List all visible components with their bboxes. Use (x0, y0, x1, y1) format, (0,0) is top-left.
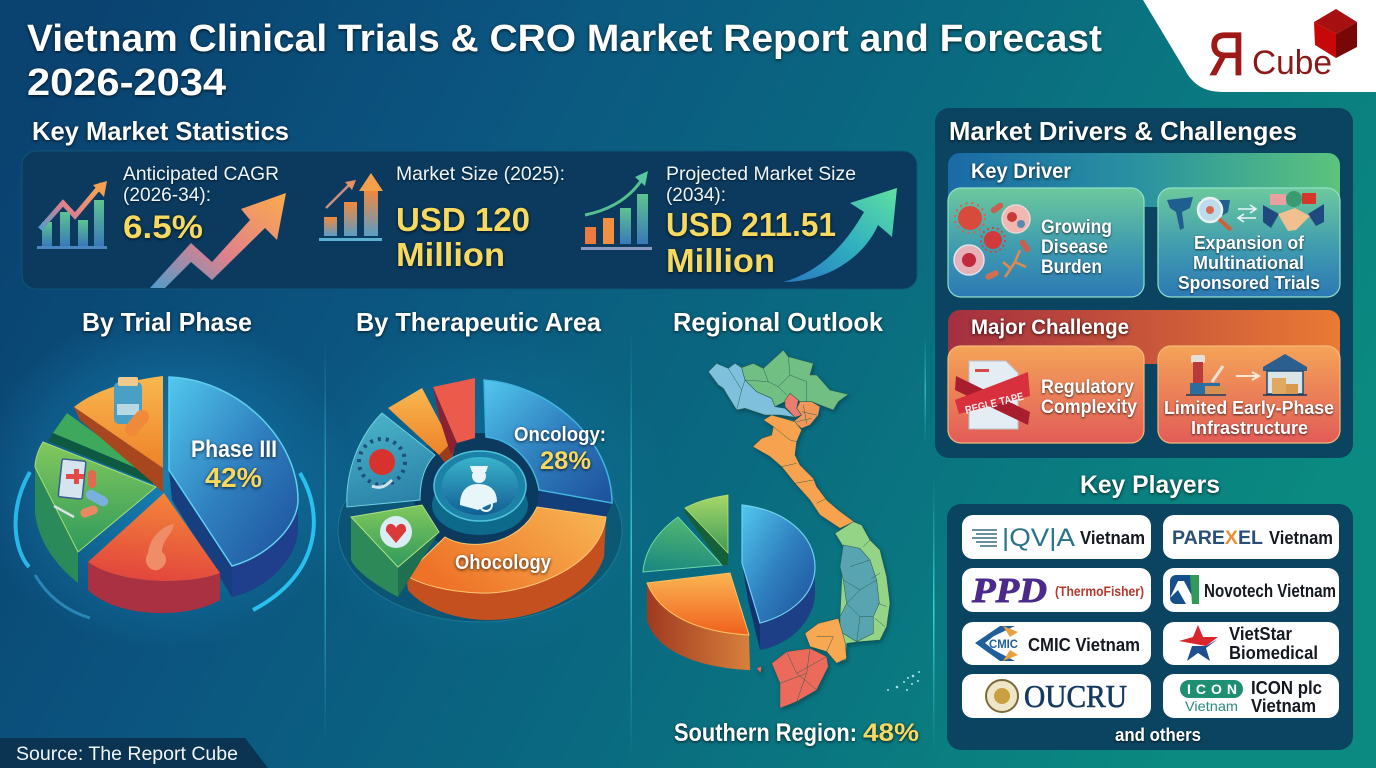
stat: projected market size (666, 163, 856, 279)
arrow: CAGR growth (150, 193, 286, 288)
label: Oncology 28%: 28% (540, 447, 591, 475)
icon: projected chart (581, 171, 652, 250)
panel: key market statistics (22, 151, 917, 289)
card: growing disease burden (948, 188, 1144, 297)
subheading panel: major challenge: Major Challenge (971, 316, 1129, 339)
icon: market size chart (319, 173, 383, 241)
map: Vietnam regions (708, 350, 890, 708)
label: Southern Region 48%: Southern Region: (674, 719, 857, 747)
logo: IQVIA: Vietnam (1080, 528, 1145, 548)
logo: VietStar: VietStar (1229, 624, 1292, 644)
slice: green (351, 505, 439, 597)
islands (887, 671, 920, 691)
logo: PPD Thermo Fisher: PPD (971, 571, 1047, 610)
card: expansion of sponsored trials (1158, 188, 1340, 297)
source tab: Source: The Report Cube (16, 744, 238, 765)
logo: ICON: ICON plc (1251, 678, 1322, 698)
note: and others: and others (1115, 725, 1201, 745)
logo: Parexel: PAREXEL (1172, 528, 1263, 549)
slice: oncology blue (484, 380, 612, 517)
stat: projected market size: (2034): (666, 184, 726, 206)
label: Phase III 42%: 42% (205, 462, 262, 493)
label (1041, 217, 1112, 278)
section headings: By Therapeutic Area (356, 307, 602, 337)
slice: red (88, 493, 220, 613)
label (1041, 377, 1137, 418)
logo: PPD Thermo Fisher (962, 568, 1151, 612)
panel: key players (947, 504, 1353, 750)
subheading panel: key driver: Key Driver (971, 160, 1071, 183)
slice: teal (347, 413, 435, 507)
stat: CAGR (123, 163, 279, 245)
label: Phase III 42%: Phase III (191, 436, 277, 463)
slice: green (35, 442, 156, 583)
label: Infrastructure (1191, 417, 1308, 438)
arrow: projected growth (783, 188, 897, 282)
slice: light green (684, 495, 728, 565)
stat: CAGR: (2026-34): (123, 184, 211, 206)
label: Growing (1041, 217, 1112, 238)
label: Southern Region 48%: 48% (863, 719, 919, 747)
slice: orange (647, 573, 750, 670)
logo: ICON: Vietnam (1185, 698, 1238, 714)
section headings (82, 307, 884, 337)
label: Expansion of (1194, 232, 1305, 253)
logo: OUCRU: OUCRU (1024, 678, 1127, 714)
label: Burden (1041, 257, 1102, 278)
logo tab: Cube (1252, 44, 1332, 82)
logo: CMIC: CMIC Vietnam (1028, 635, 1140, 655)
section headings: By Trial Phase (82, 307, 252, 337)
icon: world, magnifier, handshake (1167, 191, 1324, 231)
label: Disease (1041, 237, 1108, 258)
icon: factory to warehouse (1186, 354, 1307, 395)
pie chart: trial phase (16, 376, 314, 618)
logo: Novotech (1163, 568, 1339, 612)
logo: Parexel (1163, 515, 1339, 559)
icon: pathogens (954, 202, 1031, 281)
label: Ohocology: Ohocology (455, 552, 552, 574)
icon: red tape document (955, 361, 1030, 429)
section headings: Regional Outlook (673, 307, 884, 337)
title (27, 18, 1102, 104)
icon: CAGR chart (37, 181, 107, 249)
label (1178, 232, 1320, 293)
logo: OUCRU (962, 674, 1151, 718)
center button: doctor (432, 451, 528, 535)
heading: key market statistics: Key Market Statistics (32, 116, 289, 146)
card: regulatory complexity (948, 346, 1144, 443)
logo: ICON (1163, 674, 1339, 718)
logo: CMIC (962, 622, 1151, 665)
logo: Parexel: Vietnam (1269, 528, 1333, 548)
stat: market size 2025: Market Size (2025): (396, 163, 565, 185)
stat: CAGR: Anticipated CAGR (123, 163, 279, 185)
stat: projected market size: Projected Market Size (666, 163, 856, 185)
slice: Phase III (169, 377, 298, 597)
stat: projected market size: Million (666, 242, 775, 279)
slice: orange (74, 376, 163, 493)
label: Sponsored Trials (1178, 272, 1320, 293)
donut chart: therapeutic area (338, 378, 622, 622)
title: 2026-2034 (27, 62, 226, 104)
logo: ICON: ICON (1187, 681, 1237, 697)
card: limited early-phase infrastructure (1158, 346, 1340, 443)
title: Vietnam Clinical Trials & CRO Market Report and Forecast (27, 18, 1102, 60)
heading: Market Drivers & Challenges (949, 116, 1297, 146)
label: Limited Early-Phase (1164, 397, 1334, 418)
label: Oncology 28%: Oncology: (514, 424, 606, 446)
icon: red tape document: REGLE TAPE (964, 391, 1025, 417)
logo: VietStar (1163, 622, 1339, 665)
logo: IQVIA (962, 515, 1151, 559)
logo: ICON: Vietnam (1251, 696, 1316, 716)
stat: CAGR: 6.5% (123, 209, 203, 245)
logo: Novotech: Novotech Vietnam (1204, 581, 1336, 601)
slice: orange ring (406, 507, 606, 620)
stat: market size 2025: Million (396, 236, 505, 273)
subheading panel: key driver (948, 153, 1340, 207)
logo: VietStar: Biomedical (1229, 643, 1318, 663)
label: Regulatory (1041, 377, 1134, 398)
slice: dark green (48, 413, 153, 484)
heading: key players: Key Players (1080, 471, 1220, 499)
stat: market size 2025 (396, 163, 565, 273)
logo: PPD Thermo Fisher: (ThermoFisher) (1055, 583, 1144, 599)
pie chart: regional outlook (643, 495, 815, 670)
stat: projected market size: USD 211.51 (666, 206, 836, 243)
slice: small orange (388, 388, 456, 470)
slice: blue (742, 505, 815, 650)
label (1164, 397, 1334, 438)
panel: market drivers and challenges (935, 108, 1353, 458)
stat: market size 2025: USD 120 (396, 201, 530, 238)
label: Phase III 42% (191, 436, 277, 493)
logo tab: Я (1208, 21, 1245, 88)
logo: IQVIA: |QV|A (1002, 524, 1075, 552)
label: Multinational (1193, 252, 1304, 273)
source tab (0, 738, 268, 768)
slice: teal green (643, 517, 722, 572)
logo tab (1143, 0, 1376, 92)
logo: CMIC: CMIC (989, 639, 1018, 651)
slice: small red (433, 378, 475, 455)
subheading panel: major challenge (948, 310, 1340, 364)
label: Oncology 28% (514, 424, 606, 475)
label: Complexity (1041, 397, 1137, 418)
